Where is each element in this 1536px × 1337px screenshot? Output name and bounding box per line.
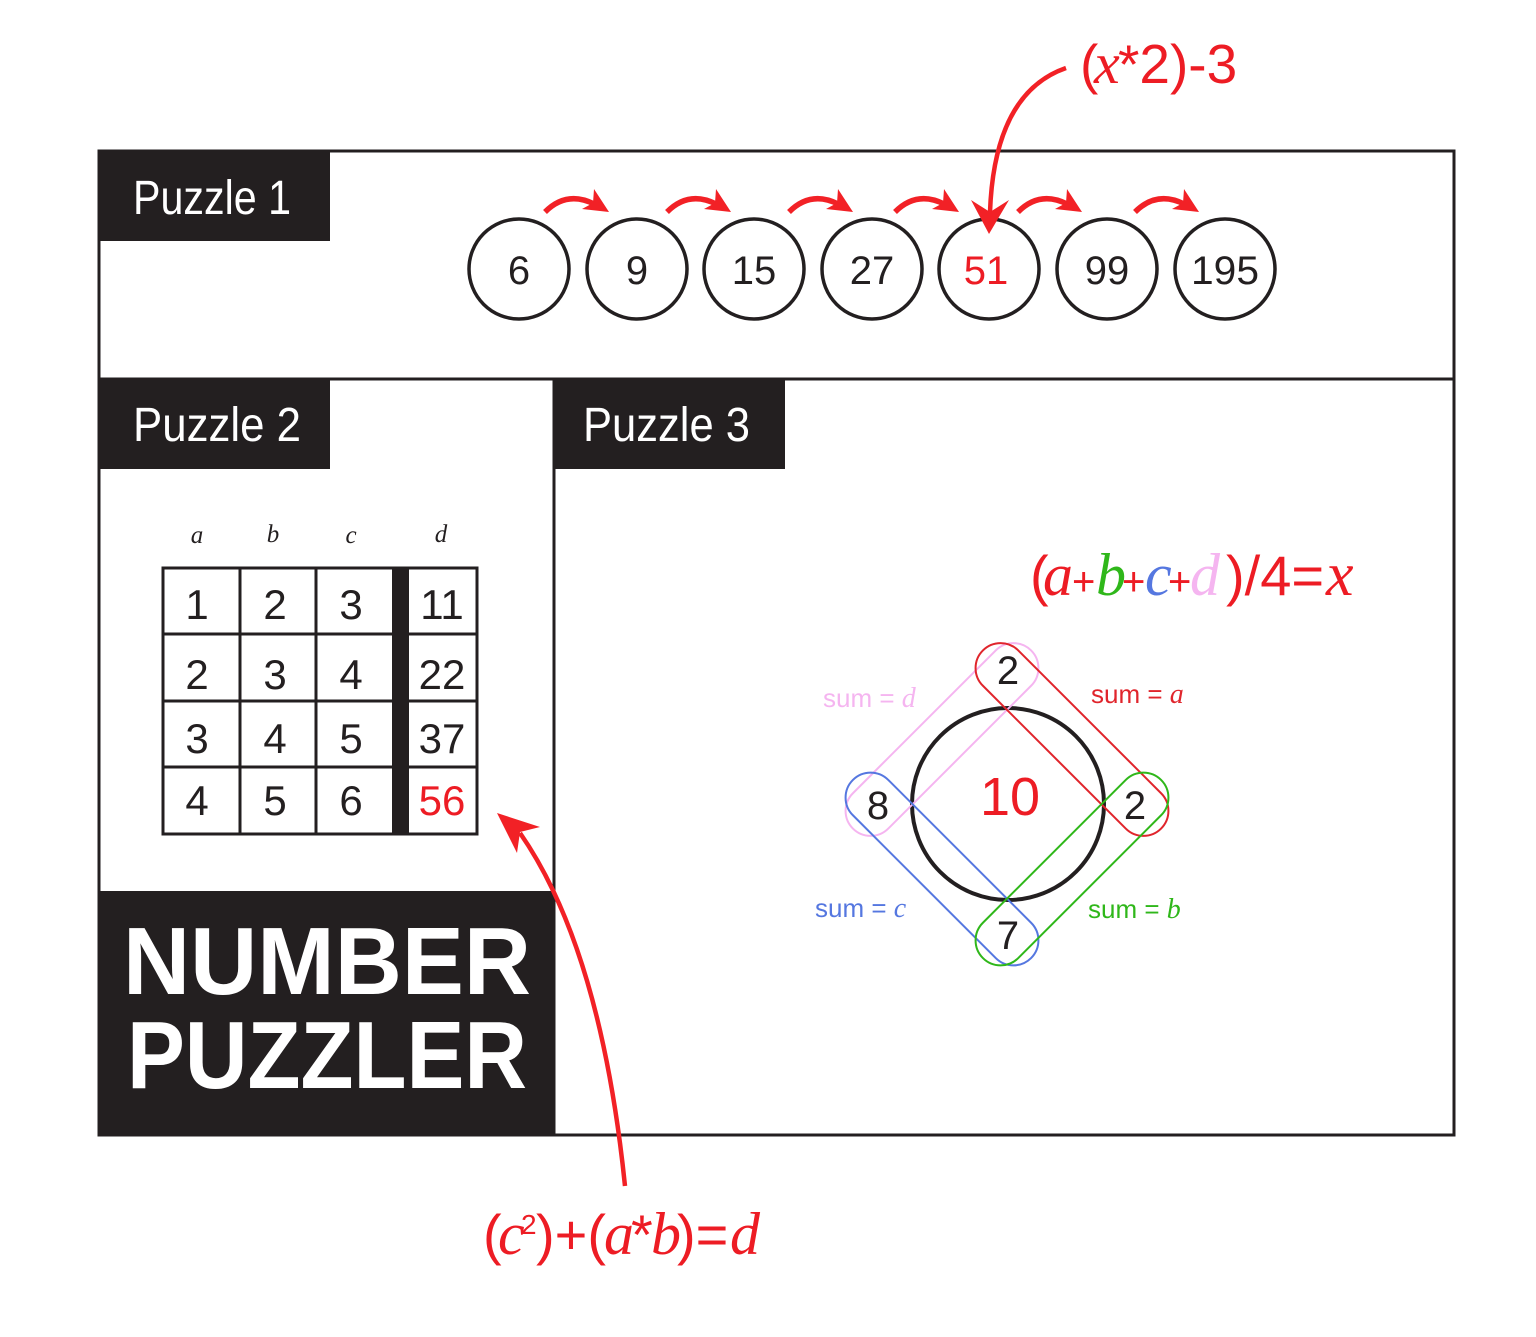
number table: 5 — [263, 777, 287, 824]
formula: c squared plus a times b equals d: d — [730, 1201, 761, 1267]
label: sum c: sum = c — [815, 893, 907, 924]
number table: 4 — [263, 715, 287, 762]
formula: c squared plus a times b equals d: a — [604, 1201, 634, 1267]
pill: sum b — [965, 762, 1179, 976]
circle 27 — [822, 219, 922, 319]
arrow: 6 to 9 — [545, 189, 609, 212]
number table: 3 — [263, 651, 287, 698]
formula: c squared plus a times b equals d: )+( — [536, 1203, 606, 1266]
formula: average of a b c d: b — [1096, 542, 1126, 608]
circle 195 — [1175, 219, 1275, 319]
circle 27: 27 — [850, 249, 894, 293]
number table: 4 — [185, 777, 209, 824]
circle 51 — [939, 219, 1039, 319]
label: sum d: sum = d — [823, 683, 917, 714]
number table: 37 — [419, 715, 465, 762]
number table: 3 — [185, 715, 209, 762]
label: sum a: sum = a — [1091, 679, 1184, 710]
arrow: formula to 51 — [971, 68, 1066, 234]
formula: c squared plus a times b equals d: b — [651, 1201, 681, 1267]
pill: sum d — [835, 633, 1049, 846]
circle 9 — [587, 219, 687, 319]
arrow: 15 to 27 — [789, 189, 853, 212]
formula: c squared plus a times b equals d: c — [498, 1201, 525, 1267]
right value: 2 — [1124, 784, 1146, 828]
number table: 2 — [263, 581, 287, 628]
formula: c squared plus a times b equals d: * — [631, 1203, 653, 1266]
formula: c squared plus a times b equals d: ( — [483, 1203, 502, 1266]
formula: average of a b c d: c — [1145, 542, 1172, 608]
center circle — [912, 708, 1104, 900]
circle 99: 99 — [1085, 249, 1129, 293]
arrow: 27 to 51 — [895, 189, 959, 212]
heading: Puzzle 1 — [98, 150, 330, 241]
formula: average of a b c d: ( — [1030, 544, 1049, 607]
number table: 3 — [339, 581, 363, 628]
outer frame with panels — [99, 151, 1454, 1135]
column labels: c — [345, 522, 357, 549]
panel: Puzzle 1 number sequence — [469, 219, 1275, 319]
heading: Puzzle 3 — [553, 379, 785, 469]
number table: 4 — [339, 651, 363, 698]
circle 99 — [1057, 219, 1157, 319]
heading: Puzzle 1: Puzzle 1 — [133, 172, 291, 225]
circle 6 — [469, 219, 569, 319]
formula: c squared plus a times b equals d: 2 — [521, 1209, 537, 1240]
number table: 56 — [419, 777, 465, 824]
number table — [163, 568, 477, 834]
formula: average of a b c d: x — [1325, 541, 1354, 609]
formula: x times 2 minus 3: x — [1093, 31, 1120, 96]
arrow: formula to 56 — [497, 813, 625, 1186]
formula: average of a b c d: + — [1072, 560, 1095, 604]
number table: 5 — [339, 715, 363, 762]
label: sum b: sum = b — [1088, 894, 1181, 925]
formula: average of a b c d: + — [1168, 560, 1191, 604]
number table: 11 — [420, 581, 464, 628]
circle 195: 195 — [1191, 249, 1259, 293]
formula: average of a b c d: a — [1043, 542, 1073, 608]
arrow: 51 to 99 — [1018, 189, 1082, 212]
column labels — [191, 521, 448, 549]
number table: 22 — [419, 651, 465, 698]
title block: PUZZLER — [127, 1002, 527, 1109]
pill: sum a — [965, 633, 1179, 846]
title block: NUMBER — [123, 908, 531, 1015]
circle 6: 6 — [508, 249, 530, 293]
heading: Puzzle 2 — [98, 379, 330, 469]
column labels: a — [191, 522, 203, 549]
pill: sum c — [835, 762, 1049, 976]
column labels: b — [267, 521, 279, 548]
diagram: number diamond — [835, 633, 1179, 976]
heading: Puzzle 3: Puzzle 3 — [583, 399, 750, 452]
circle 9: 9 — [626, 249, 648, 293]
formula: x times 2 minus 3: ( — [1080, 33, 1098, 95]
formula: average of a b c d: d — [1190, 542, 1221, 608]
arrow: 99 to 195 — [1135, 189, 1199, 212]
formula: average of a b c d: )/4= — [1226, 544, 1324, 607]
top value: 2 — [997, 649, 1019, 693]
arrow: 9 to 15 — [667, 189, 731, 212]
formula: c squared plus a times b equals d: )= — [677, 1203, 728, 1266]
formula: x times 2 minus 3: *2)-3 — [1118, 33, 1237, 95]
column labels: d — [435, 521, 448, 548]
heading: Puzzle 2: Puzzle 2 — [133, 399, 301, 452]
circle 15: 15 — [732, 249, 776, 293]
bottom value: 7 — [997, 914, 1019, 958]
title block — [98, 891, 555, 1136]
circle 15 — [704, 219, 804, 319]
left value: 8 — [867, 784, 889, 828]
number table: 1 — [185, 581, 209, 628]
circle 51: 51 — [964, 249, 1008, 293]
center value: 10 — [980, 767, 1040, 827]
number table: 2 — [185, 651, 209, 698]
formula: average of a b c d: + — [1122, 560, 1145, 604]
number table: 6 — [339, 777, 363, 824]
